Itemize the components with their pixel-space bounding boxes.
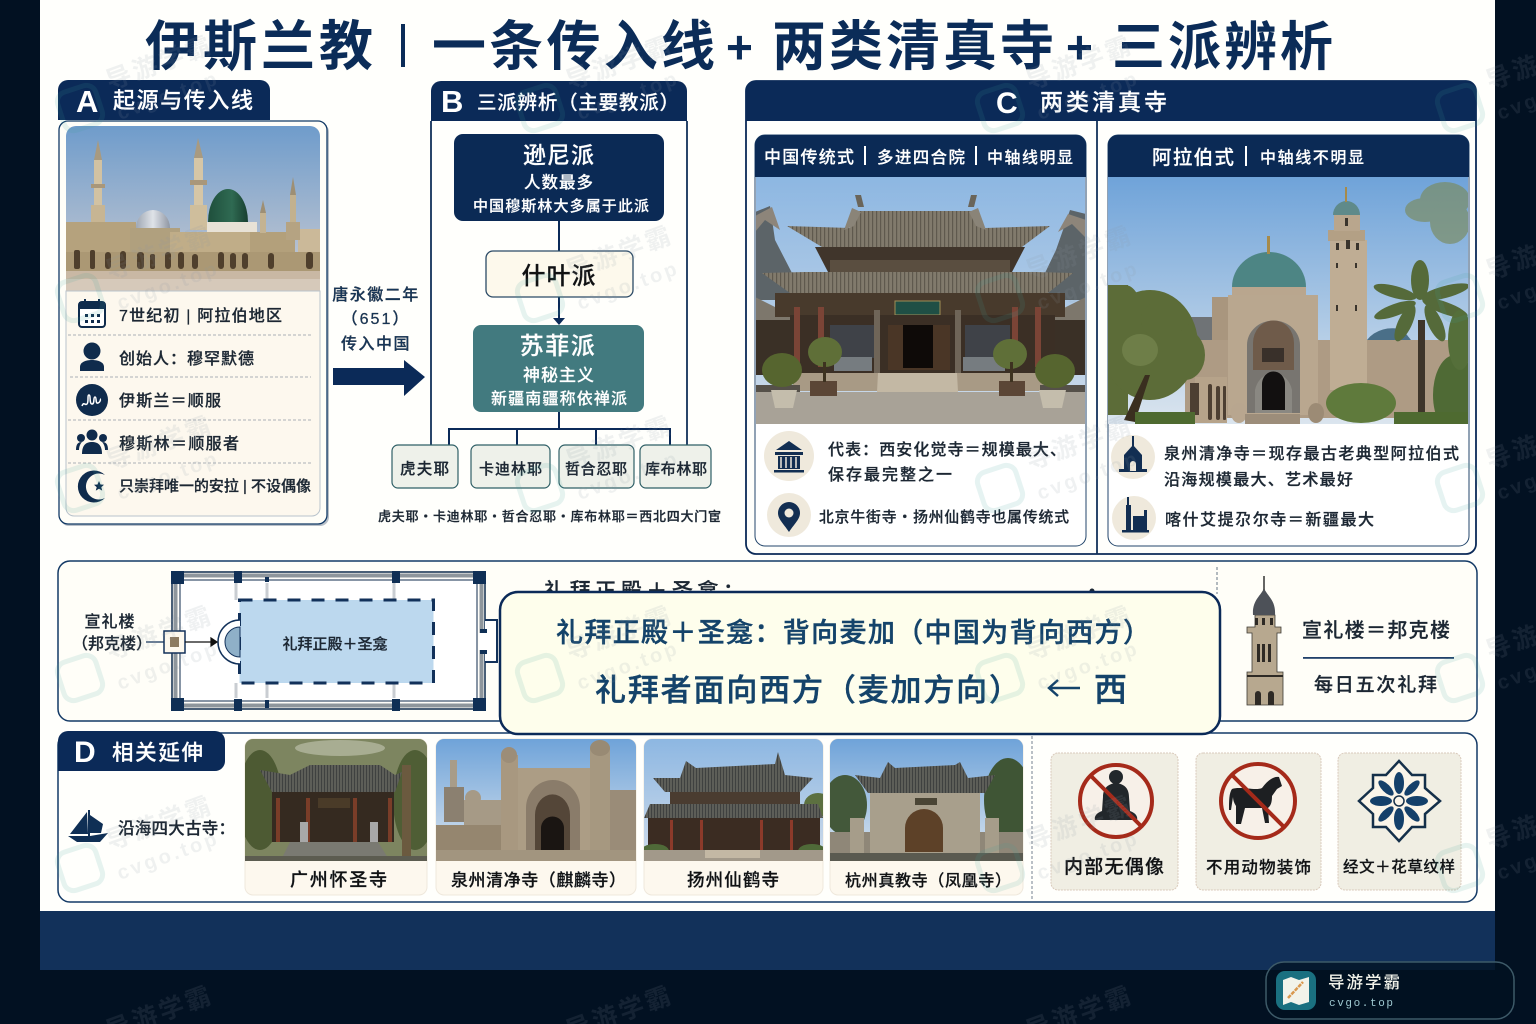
photo card: guangzhou <box>238 739 437 895</box>
representative mosque text: 代表：西安化觉寺＝规模最大、 <box>828 441 1066 459</box>
watermark layer: cvgo.top <box>114 447 223 505</box>
title: 伊斯兰教 <box>145 17 373 77</box>
representative mosque text: 保存最完整之一 <box>828 465 952 484</box>
photo card: yangzhou: 扬州仙鹤寺 <box>687 870 779 890</box>
icon: arabic seal <box>76 384 108 416</box>
card header: chinese style: 中国传统式 <box>764 148 854 167</box>
section: floor plan and orientation <box>58 561 1477 721</box>
sunni box: 人数最多 <box>524 173 594 192</box>
panel A: origins <box>58 80 329 526</box>
transmission label: 唐永徽二年 <box>332 285 420 304</box>
section D tab <box>58 731 225 771</box>
panel C header <box>746 81 1476 121</box>
arrow: plan axis <box>185 638 217 646</box>
prayer hall: 礼拜正殿＋圣龛 <box>282 635 388 653</box>
watermark layer: 导游学霸 <box>1022 411 1137 476</box>
card header: arabic style <box>1108 135 1469 177</box>
panel B: three sects <box>378 81 721 524</box>
info list <box>66 291 320 516</box>
card: arabic style <box>1102 135 1477 546</box>
icon: sailing ship <box>68 810 108 842</box>
sufi box <box>473 325 644 412</box>
panel B header: B <box>441 84 463 119</box>
menhuan boxes: 库布林耶 <box>645 461 707 478</box>
photo: arabic style mosque <box>1102 177 1477 435</box>
entrance <box>479 620 497 662</box>
row: worship: 只崇拜唯一的安拉 | 不设偶像 <box>119 477 311 495</box>
other traditional mosques: 北京牛街寺・扬州仙鹤寺也属传统式 <box>819 508 1069 526</box>
quanzhou mosque text: 泉州清净寺＝现存最古老典型阿拉伯式 <box>1164 444 1459 463</box>
row: muslim meaning: 穆斯林＝顺服者 <box>119 434 239 453</box>
icon: floral ornament <box>1359 761 1440 841</box>
callout: orientation: 西 <box>1094 671 1127 708</box>
watermark layer: cvgo.top <box>114 827 223 885</box>
watermark layer: cvgo.top <box>1034 67 1143 125</box>
rule card: no idols: 内部无偶像 <box>1064 856 1164 878</box>
watermark layer: 导游学霸 <box>102 221 217 286</box>
transmission label: （651） <box>342 310 410 328</box>
hidden caption behind callout <box>544 580 1094 603</box>
coastal mosques label: 沿海四大古寺： <box>118 819 235 838</box>
quanzhou mosque text <box>1111 435 1459 489</box>
watermark layer: cvgo.top <box>574 447 683 505</box>
icon: brand logo <box>1276 971 1316 1010</box>
minaret caption: 每日五次礼拜 <box>1314 674 1437 696</box>
minaret illustration <box>1247 576 1283 705</box>
rule card: no animals <box>1196 753 1321 890</box>
title: 三派辨析 <box>1112 18 1333 77</box>
photo card: guangzhou: 广州怀圣寺 <box>290 870 387 890</box>
menhuan boxes: 卡迪林耶 <box>479 461 542 478</box>
watermark layer: 导游学霸 <box>102 411 217 476</box>
photo card: quanzhou: 泉州清净寺（麒麟寺） <box>451 871 626 890</box>
photo card: hangzhou <box>823 739 1032 895</box>
watermark layer: 导游学霸 <box>562 411 677 476</box>
prayer hall <box>240 600 434 683</box>
icon: crescent and star <box>78 470 105 502</box>
panel B frame <box>431 121 687 445</box>
title: + <box>726 21 753 73</box>
photo card: yangzhou <box>641 739 832 895</box>
title: 两类清真寺 <box>772 17 1054 77</box>
panel A header tab: A <box>76 84 98 119</box>
watermark layer: cvgo.top <box>1034 447 1143 505</box>
watermark layer: 导游学霸 <box>562 601 677 666</box>
watermark layer: 导游学霸 <box>562 31 677 96</box>
section D frame <box>58 733 1477 902</box>
other traditional mosques <box>767 493 1069 537</box>
watermark layer: cvgo.top <box>1034 257 1143 315</box>
minaret caption: 宣礼楼＝邦克楼 <box>1302 619 1450 642</box>
sunni box: 逊尼派 <box>523 142 595 168</box>
menhuan boxes: 哲合忍耶 <box>565 461 627 478</box>
minaret marker <box>146 631 185 653</box>
brand badge: cvgo.top <box>1329 998 1393 1010</box>
title: 一条传入线 <box>432 17 715 77</box>
icon: person <box>80 342 104 371</box>
panel C header: 两类清真寺 <box>1040 89 1167 115</box>
quanzhou mosque text: 沿海规模最大、艺术最好 <box>1164 471 1353 489</box>
panel C header: C <box>996 87 1018 120</box>
watermark layer: cvgo.top <box>1034 637 1143 695</box>
sunni box: 中国穆斯林大多属于此派 <box>473 197 649 215</box>
watermark layer: 导游学霸 <box>1022 791 1137 856</box>
sufi box: 神秘主义 <box>523 366 595 385</box>
photo: chinese style mosque <box>755 177 1086 424</box>
row: date and place: 7世纪初 | 阿拉伯地区 <box>119 306 282 325</box>
icon: no idol <box>1080 765 1152 837</box>
kashgar mosque text: 喀什艾提尕尔寺＝新疆最大 <box>1165 511 1374 529</box>
rule card: ornament: 经文＋花草纹样 <box>1343 857 1455 876</box>
card header: arabic style: 阿拉伯式 <box>1152 147 1234 169</box>
minaret plan label: 宣礼楼 <box>84 613 136 631</box>
watermark layer: cvgo.top <box>114 257 223 315</box>
rule card: ornament <box>1338 753 1461 890</box>
icon: minaret gate <box>1112 496 1156 540</box>
sunni box <box>454 134 664 221</box>
minaret caption <box>1302 619 1454 696</box>
brand badge <box>1266 962 1514 1019</box>
icon: people <box>76 430 108 454</box>
watermark layer: 导游学霸 <box>102 31 217 96</box>
photo card: hangzhou: 杭州真教寺（凤凰寺） <box>845 871 1011 890</box>
watermark layer: cvgo.top <box>574 67 683 125</box>
panel A header tab: 起源与传入线 <box>113 88 253 113</box>
rule card: no animals: 不用动物装饰 <box>1206 858 1311 877</box>
kashgar mosque text <box>1112 496 1374 540</box>
section frame <box>58 561 1477 721</box>
menhuan boxes: 虎夫耶 <box>400 460 449 478</box>
photo card: quanzhou <box>436 739 636 895</box>
title: + <box>1066 21 1093 73</box>
bottom band <box>40 911 1495 970</box>
mihrab niche <box>218 620 240 664</box>
representative mosque text <box>764 431 1066 484</box>
watermark layer: 导游学霸 <box>102 791 217 856</box>
connector lines <box>449 221 670 446</box>
minaret plan label: （邦克楼） <box>72 635 152 653</box>
icon: map pin <box>767 493 811 537</box>
watermark layer: 导游学霸 <box>562 221 677 286</box>
rule card: no idols <box>1051 753 1178 890</box>
photo: mosque with green dome <box>66 126 320 291</box>
section D tab: 相关延伸 <box>112 741 203 765</box>
icon: arabic gate <box>1111 435 1155 479</box>
card: chinese style <box>755 135 1086 546</box>
icon: no animal <box>1221 764 1295 838</box>
section D tab: D <box>74 736 96 769</box>
transmission label: 传入中国 <box>341 335 411 353</box>
panel A card <box>59 121 329 526</box>
panel C: two mosque types <box>746 81 1477 554</box>
panel C frame <box>746 81 1476 554</box>
watermark layer: cvgo.top <box>114 67 223 125</box>
watermark layer: 导游学霸 <box>1022 221 1137 286</box>
panel B header <box>431 81 687 121</box>
watermark layer: cvgo.top <box>574 257 683 315</box>
callout: orientation: 礼拜者面向西方（麦加方向） <box>595 673 1020 708</box>
callout: orientation <box>500 592 1220 734</box>
floor plan diagram <box>146 571 497 711</box>
card header: chinese style <box>755 135 1086 177</box>
watermark layer: cvgo.top <box>114 637 223 695</box>
icon: mosque gate <box>764 431 814 481</box>
watermark layer: 导游学霸 <box>1022 601 1137 666</box>
watermark layer: cvgo.top <box>1034 827 1143 885</box>
sufi box: 苏菲派 <box>520 333 596 360</box>
arrow: transmission <box>333 360 425 396</box>
card header: chinese style: 中轴线明显 <box>987 149 1073 167</box>
panel B header: 三派辨析（主要教派） <box>477 92 679 114</box>
shia box <box>486 251 633 297</box>
brand badge: 导游学霸 <box>1328 972 1400 992</box>
hidden caption behind callout: 礼拜正殿＋圣龛： <box>544 580 744 603</box>
card header: chinese style: 多进四合院 <box>877 148 966 167</box>
minaret plan label <box>72 613 152 653</box>
row: founder: 创始人：穆罕默德 <box>119 349 254 368</box>
watermark layer: cvgo.top <box>574 637 683 695</box>
sufi box: 新疆南疆称依禅派 <box>491 390 627 408</box>
row: islam meaning: 伊斯兰＝顺服 <box>119 392 221 410</box>
card header: arabic style: 中轴线不明显 <box>1260 149 1364 167</box>
shia box: 什叶派 <box>522 263 596 290</box>
section D: extensions <box>58 731 1477 902</box>
menhuan note: 虎夫耶・卡迪林耶・哲合忍耶・库布林耶＝西北四大门宦 <box>378 509 721 524</box>
callout: orientation: 礼拜正殿＋圣龛：背向麦加（中国为背向西方） <box>556 618 1150 648</box>
watermark layer: 导游学霸 <box>102 601 217 666</box>
title <box>145 17 1333 77</box>
transmission label <box>332 285 420 353</box>
icon: calendar <box>79 299 105 327</box>
menhuan boxes <box>392 445 711 488</box>
panel A header tab <box>58 80 270 120</box>
watermark layer: 导游学霸 <box>1022 31 1137 96</box>
